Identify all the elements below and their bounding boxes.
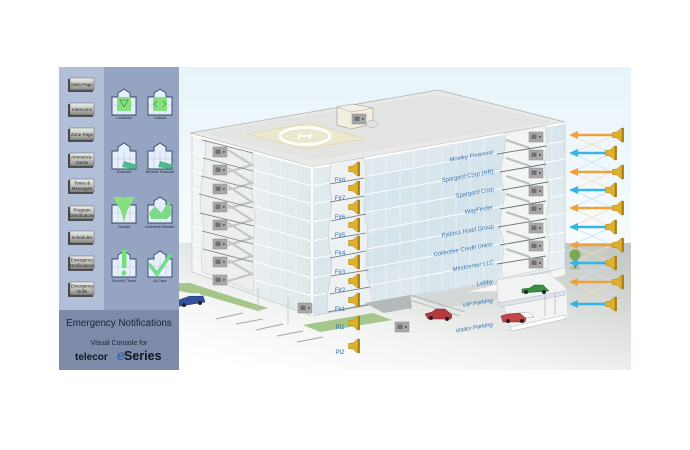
navigation buttons: Messages: [72, 186, 93, 191]
icon labels: Tornado: [118, 225, 130, 229]
navigation buttons: Emergency: [71, 284, 94, 288]
tenant labels: Mosley Financial: [449, 150, 494, 164]
brand logo: telecor: [75, 352, 108, 363]
icon labels: [112, 116, 175, 283]
control panel: [59, 67, 179, 370]
parking ramp: [410, 283, 497, 308]
floor labels: Flr3: [335, 270, 346, 276]
icon labels: Lockout: [154, 116, 166, 120]
right stairwell cutout: [497, 126, 549, 278]
navigation buttons: Zone Page: [71, 132, 93, 137]
tenant labels: Lobby: [476, 279, 494, 288]
right facade: [312, 123, 565, 316]
floor labels: Pt1: [335, 325, 345, 331]
navigation buttons: [69, 78, 95, 296]
panel subtitle: Visual Console for: [91, 340, 148, 347]
panel title: Emergency Notifications: [66, 318, 172, 329]
green strip front: [303, 313, 392, 332]
tenant labels: Collective Credit Union: [433, 242, 494, 258]
icon labels: Lockdown: [116, 116, 132, 120]
navigation buttons: Notifications: [70, 263, 95, 268]
center floor cutout: [327, 158, 372, 312]
icon labels: All Clear: [153, 279, 167, 283]
cross links: [572, 136, 612, 304]
navigation buttons: ments: [76, 160, 89, 165]
floor labels: [335, 178, 346, 356]
navigation buttons: Drills: [77, 289, 88, 294]
tenant labels: WayFinder: [464, 205, 494, 216]
car: red garage: [501, 312, 534, 323]
icon labels: Evacuate: [117, 170, 131, 174]
navigation buttons: Main Page: [71, 82, 93, 87]
left stairwell cutout: [199, 140, 255, 292]
parking garage cutout: [497, 272, 568, 331]
roof equipment box: [337, 104, 378, 129]
tenant labels: Mindcenter LLC: [452, 260, 495, 273]
orange arrows: [576, 135, 618, 282]
scene background: [179, 67, 631, 370]
helipad: [247, 123, 364, 149]
speakers: [612, 128, 624, 142]
lobby slab: [467, 268, 565, 292]
brand logo: e: [117, 347, 125, 363]
roof: [190, 90, 565, 167]
navigation buttons: Emergency: [71, 258, 94, 262]
navigation buttons: Intercoms: [72, 107, 93, 112]
blue arrows: [576, 153, 611, 304]
floor labels: Pt2: [335, 350, 345, 356]
service box front: [395, 322, 409, 332]
floor labels: Flr1: [335, 307, 346, 313]
navigation buttons: Announce-: [71, 154, 93, 160]
green strip left: [179, 283, 268, 311]
ground details: [179, 268, 568, 342]
icon labels: Inclement Weather: [145, 225, 175, 229]
parking entry: [365, 295, 412, 313]
status arrows and speakers: [569, 128, 624, 311]
center speakers: [348, 162, 360, 353]
floor labels: Flr8: [335, 178, 346, 184]
brand logo: Series: [124, 349, 162, 363]
floor labels: Flr5: [335, 233, 346, 239]
alert icons: [112, 89, 174, 277]
tenant labels: Pydima Hotel Group: [441, 224, 495, 239]
tree: [569, 250, 581, 270]
icon labels: Security Threat: [112, 279, 136, 283]
building: [190, 90, 565, 316]
tenant labels: VIP Parking: [462, 298, 494, 309]
tenant labels: Spargard Corp: [455, 187, 495, 200]
navigation buttons: Program: [73, 208, 91, 212]
left facade: [192, 135, 312, 316]
floor labels: Flr4: [335, 251, 346, 257]
tenant labels: [433, 150, 495, 335]
car: blue: [179, 293, 205, 307]
floor labels: Flr6: [335, 215, 346, 221]
tenant labels: Visitor Parking: [455, 322, 494, 335]
car: green: [522, 285, 549, 294]
icon labels: Reverse Evacuate: [146, 170, 174, 174]
tenant labels: Spargard Corp (HR): [441, 169, 494, 184]
floor labels: Flr7: [335, 196, 346, 202]
service box corner: [298, 303, 312, 313]
navigation buttons: Schedules: [71, 235, 93, 240]
navigation buttons: Tones &: [74, 180, 90, 186]
car: red center: [425, 309, 452, 321]
navigation buttons: Distributions: [70, 213, 95, 218]
brand logo: [75, 347, 162, 363]
floor labels: Flr2: [335, 288, 346, 294]
